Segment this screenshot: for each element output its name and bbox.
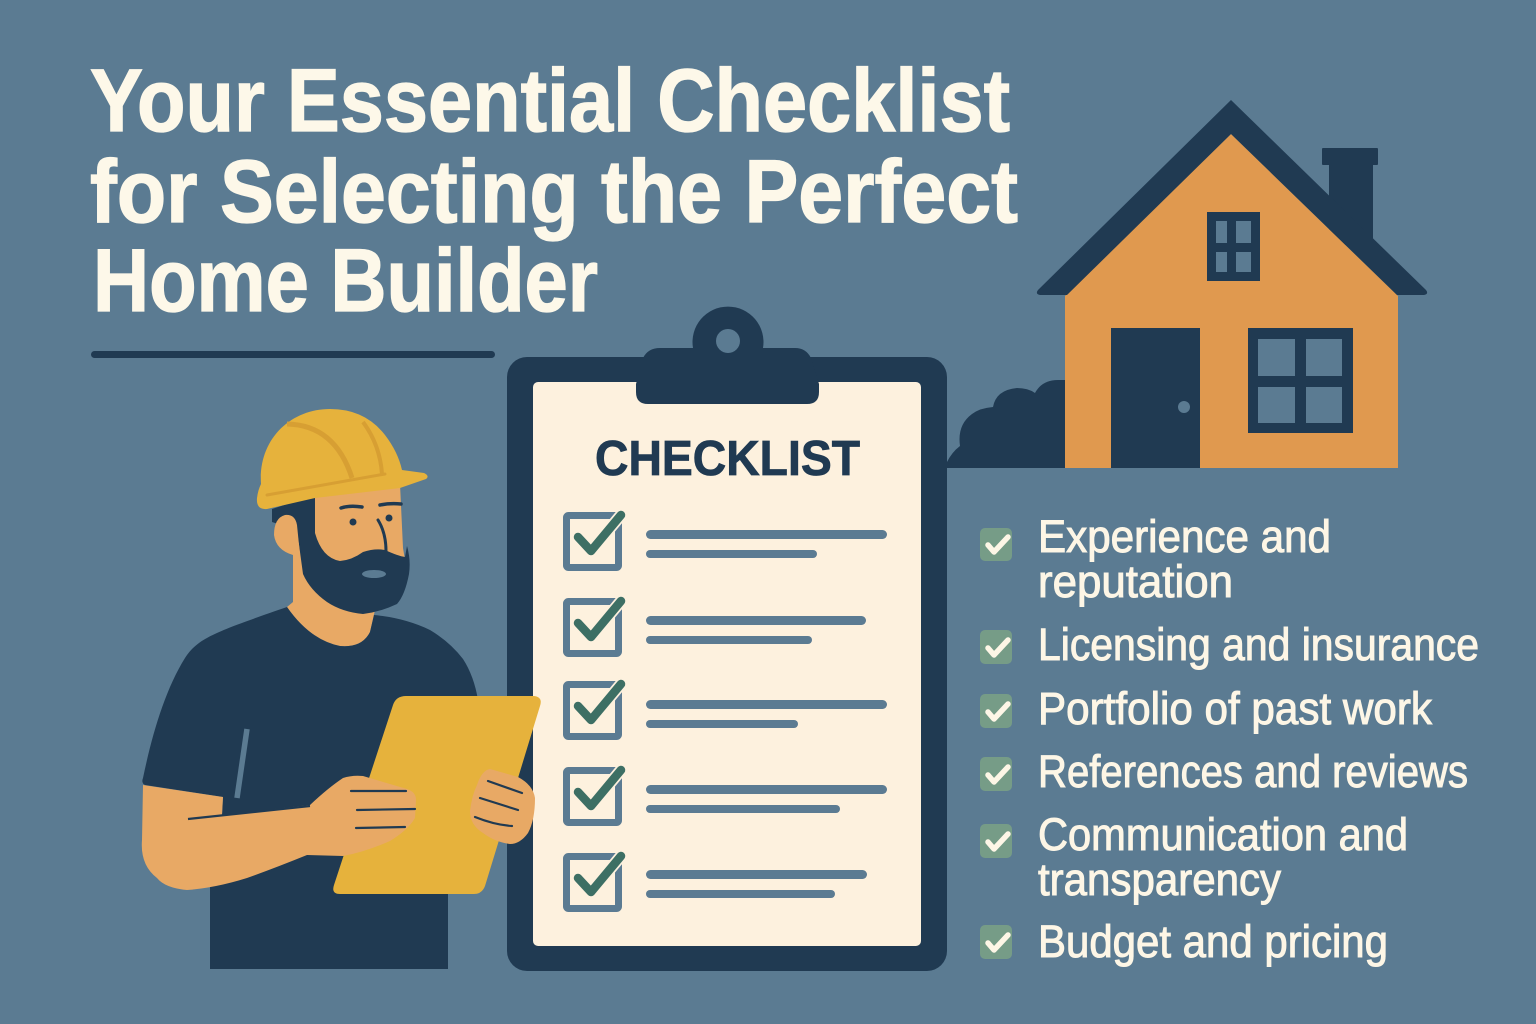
- eyes and brows: [341, 504, 401, 551]
- item: references and reviews: References and reviews: [1038, 746, 1468, 797]
- item: communication and transparency: [980, 809, 1408, 905]
- panel: clipboard: [507, 307, 947, 971]
- neck: [287, 540, 375, 646]
- hair and beard: [272, 495, 410, 614]
- list: selection criteria: [980, 511, 1479, 967]
- checklist row 5: [566, 856, 867, 908]
- title: [90, 50, 1018, 330]
- chimney: [1322, 148, 1378, 245]
- title underline: [91, 351, 495, 358]
- roof: [1037, 100, 1427, 295]
- checklist row 4: [566, 770, 887, 822]
- house wall: [1065, 134, 1398, 468]
- item: communication and transparency: transparency: [1038, 854, 1281, 905]
- item: experience and reputation: Experience and: [1038, 511, 1331, 562]
- hard hat: [257, 409, 428, 509]
- ear: [274, 515, 300, 555]
- checklist row 2: [566, 601, 866, 654]
- title: Your Essential Checklist: [90, 50, 1010, 150]
- sleeve highlight: [237, 729, 247, 798]
- illustration: builder: [142, 409, 541, 969]
- checklist row 1: [566, 515, 887, 568]
- item: communication and transparency: Communication and: [1038, 809, 1408, 860]
- clipboard paper: [533, 382, 921, 946]
- item: experience and reputation: reputation: [1038, 556, 1233, 607]
- torso and shirt: [142, 607, 478, 969]
- bush: [947, 380, 1066, 468]
- left arm and hand: [142, 776, 416, 890]
- clipboard heading: CHECKLIST: [595, 432, 860, 486]
- checklist row 3: [566, 684, 887, 736]
- tablet: [333, 696, 541, 894]
- mouth: [362, 570, 386, 578]
- title: for Selecting the Perfect: [90, 141, 1018, 241]
- item: licensing and insurance: Licensing and insurance: [1038, 619, 1479, 670]
- front window: [1248, 328, 1353, 433]
- face: [312, 484, 405, 590]
- title: Home Builder: [93, 230, 598, 330]
- item: portfolio of past work: Portfolio of past work: [1038, 683, 1432, 734]
- attic window: [1207, 212, 1260, 281]
- door: [1111, 328, 1200, 468]
- illustration: house: [947, 100, 1427, 468]
- right hand: [470, 769, 535, 844]
- clipboard board: [507, 357, 947, 971]
- clipboard clip: [636, 307, 819, 404]
- item: budget and pricing: Budget and pricing: [1038, 916, 1388, 967]
- item: experience and reputation: [980, 511, 1331, 607]
